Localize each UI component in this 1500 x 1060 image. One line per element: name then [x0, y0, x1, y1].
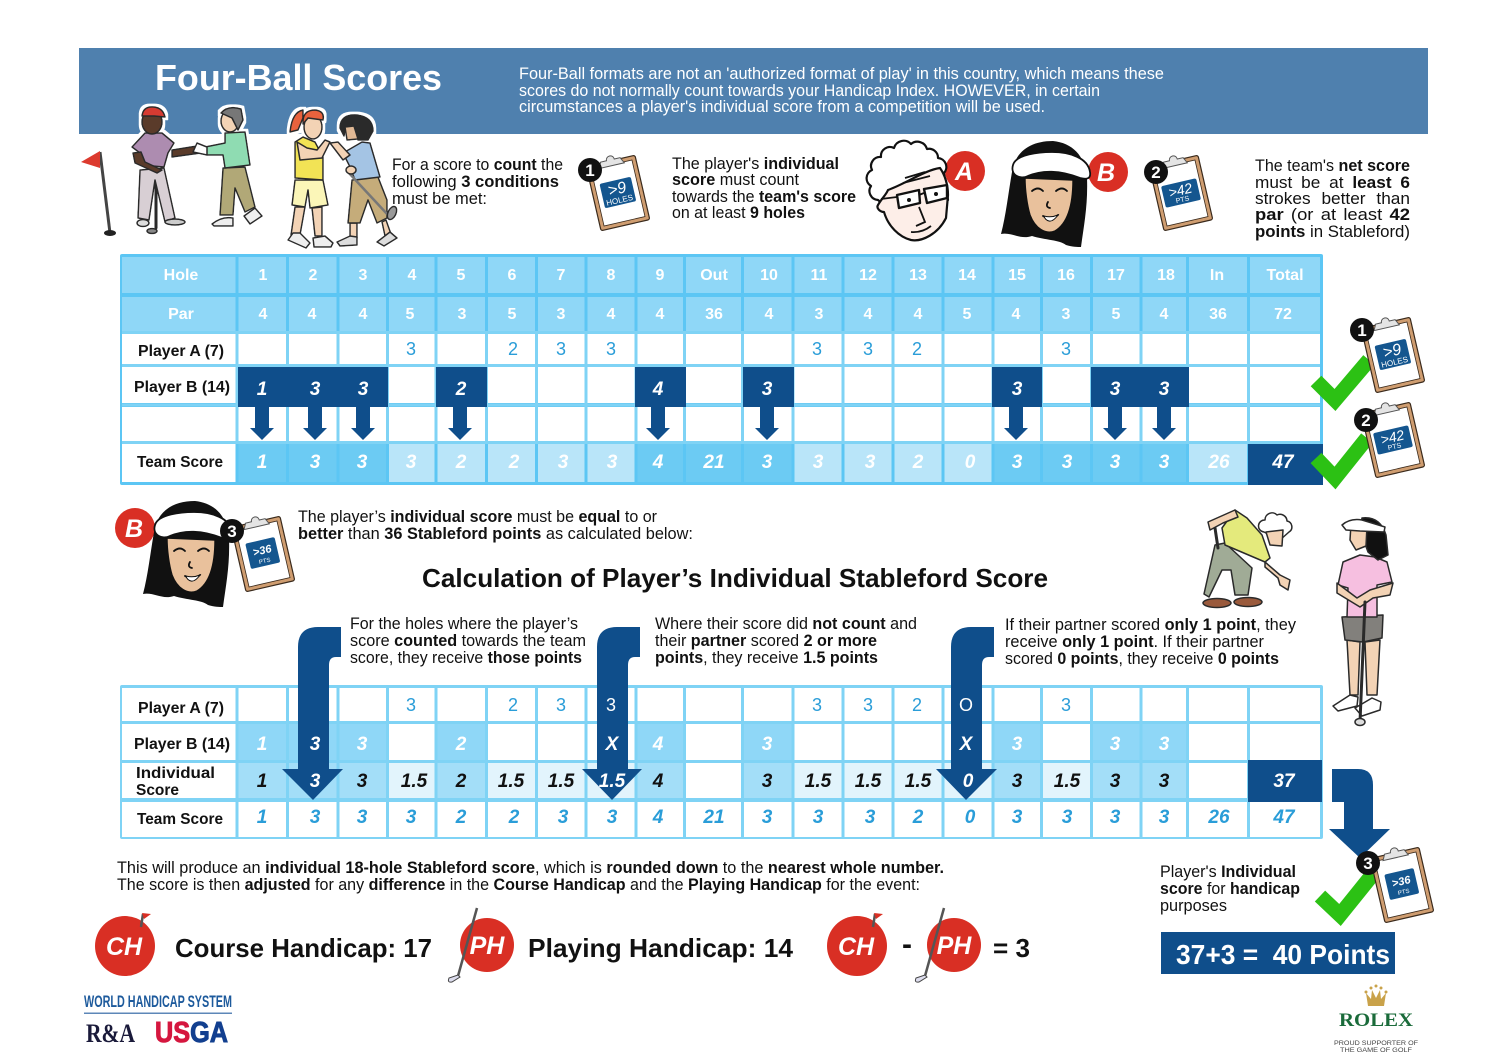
- row: hole numbers: 13: [909, 267, 927, 284]
- text: counted holes rule: score, they receive those points: [350, 648, 582, 667]
- row: hole numbers: 9: [656, 267, 665, 284]
- row: team score: 2: [912, 452, 924, 473]
- row: player B scores with dark counted cells: 1: [257, 379, 267, 400]
- row: par: Par: [168, 306, 194, 323]
- result box: [1161, 932, 1395, 974]
- row: team score: 2: [508, 807, 520, 828]
- row: player B scores with dark counted cells: 3: [1159, 379, 1170, 400]
- row: team score: 3: [406, 452, 417, 473]
- row: player A scores: 2: [912, 339, 922, 359]
- text: counted holes rule: score counted towards the team: [350, 631, 586, 650]
- row: par: 5: [1112, 306, 1121, 323]
- icon: course handicap badge: [95, 913, 155, 976]
- illustration: standing female golfer: [1333, 518, 1393, 726]
- row: player B: 3: [1110, 734, 1121, 755]
- row: player B: [134, 734, 1170, 755]
- row: hole numbers: 12: [859, 267, 877, 284]
- row: par: 36: [705, 306, 723, 323]
- row: team score: 3: [1159, 807, 1170, 828]
- text: condition two: par (or at least 42: [1255, 205, 1410, 224]
- row: team score: Team Score: [137, 454, 223, 471]
- row: individual score: 1: [257, 771, 267, 792]
- checkmark and clipboard: condition 1 met: >9: [1381, 341, 1403, 362]
- equation: course minus playing handicap: -: [902, 928, 912, 961]
- row: par: 5: [963, 306, 972, 323]
- row: team score: 3: [310, 807, 321, 828]
- row: individual score: 0: [963, 771, 974, 792]
- illustration: player A face with badge: [867, 141, 985, 240]
- arrows: counted scores down to team score: [250, 407, 1176, 440]
- row: hole numbers: 15: [1008, 267, 1026, 284]
- row: player A: Player A (7): [138, 700, 224, 717]
- row: team score: [137, 807, 1296, 828]
- heading: calculation section: Calculation of Player’s Individual Stableford Score: [422, 563, 1048, 593]
- row: individual score: 1.5: [855, 771, 882, 792]
- text: not counted rule: [655, 614, 917, 667]
- text: counted holes rule: For the holes where the player’s: [350, 614, 578, 633]
- title: Four-Ball Scores: [155, 57, 442, 98]
- row: team score: 26: [1207, 452, 1230, 473]
- row: team score: 1: [257, 452, 267, 473]
- row: hole numbers: 4: [408, 267, 417, 284]
- row: hole numbers: Hole: [164, 267, 198, 284]
- row: player B scores with dark counted cells: 4: [652, 379, 664, 400]
- row: par: 72: [1274, 306, 1292, 323]
- row: hole numbers: 6: [508, 267, 517, 284]
- row: individual score: 1.5: [905, 771, 932, 792]
- row: team score: 3: [865, 452, 876, 473]
- row: team score: 3: [762, 452, 773, 473]
- row: player A scores: 2: [508, 339, 518, 359]
- row: team score: 3: [310, 452, 321, 473]
- row: par: [168, 306, 1292, 323]
- row: team score: 3: [1159, 452, 1170, 473]
- row: par: 4: [864, 306, 873, 323]
- text: three conditions intro: following 3 conditions: [392, 172, 559, 191]
- illustration: two female golfers high-fiving: [288, 110, 399, 248]
- row: par: 4: [1160, 306, 1169, 323]
- arrow: total to result: [1329, 769, 1390, 858]
- text: condition two: The team's net score: [1255, 156, 1410, 175]
- row: hole numbers: 11: [811, 267, 828, 284]
- row: player B: 3: [357, 734, 368, 755]
- row: team score: [137, 444, 1323, 485]
- row: team score: 2: [455, 807, 467, 828]
- text: third condition: better than 36 Stableford points as calculated below:: [298, 524, 693, 543]
- text: handicap purposes: Player's Individual: [1160, 862, 1296, 881]
- text: playing handicap value: Playing Handicap: 14: [528, 933, 794, 963]
- row: player B scores with dark counted cells: 3: [1110, 379, 1121, 400]
- checkmark and clipboard: condition 3 met: >36: [1391, 874, 1413, 890]
- checkmark and clipboard: condition 2 met: [1316, 397, 1425, 478]
- arrow: not counted holes: [582, 627, 642, 800]
- text: not counted rule: their partner scored 2 or more: [655, 631, 877, 650]
- row: par: 4: [308, 306, 317, 323]
- row: team score: 0: [965, 807, 976, 828]
- text: third condition: The player’s individual score must be equal to or: [298, 507, 657, 526]
- illustration: bending older woman: [1203, 510, 1292, 608]
- icon: clipboard 1, more than 9 holes: 1: [585, 161, 595, 180]
- row: team score: 3: [1110, 807, 1121, 828]
- text: partner one point rule: If their partner scored only 1 point, they: [1005, 615, 1296, 634]
- row: team score: 3: [1062, 452, 1073, 473]
- row: player B: X: [959, 734, 974, 755]
- row: player B scores with dark counted cells: 3: [310, 379, 321, 400]
- row: hole numbers: 1: [259, 267, 268, 284]
- row: player B: X: [605, 734, 620, 755]
- row: player B: Player B (14): [134, 736, 230, 753]
- row: par: 4: [607, 306, 616, 323]
- text: partner one point rule: receive only 1 point. If their partner: [1005, 632, 1264, 651]
- icon: course handicap badge: CH: [106, 933, 143, 961]
- row: individual score: Score: [136, 782, 179, 799]
- text: handicap purposes: score for handicap: [1160, 879, 1300, 898]
- row: hole numbers: [164, 267, 1304, 284]
- logo: World Handicap System, R&A, USGA: USGA: [155, 1017, 228, 1049]
- row: team score: 1: [257, 807, 267, 828]
- row: team score: 0: [965, 452, 976, 473]
- row: player B: 2: [455, 734, 467, 755]
- text: not counted rule: points, they receive 1.5 points: [655, 648, 878, 667]
- row: par: 3: [815, 306, 824, 323]
- row: hole numbers: 5: [457, 267, 466, 284]
- row: par: 4: [1012, 306, 1021, 323]
- row: team score: 3: [607, 807, 618, 828]
- row: player B: 3: [1012, 734, 1023, 755]
- header banner: [79, 48, 1428, 134]
- row: team score: 3: [357, 807, 368, 828]
- arrow: partner zero points: [936, 627, 997, 800]
- logo: World Handicap System, R&A, USGA: WORLD HANDICAP SYSTEM: [84, 992, 232, 1011]
- row: team score: 4: [652, 452, 664, 473]
- text: condition two: points in Stableford): [1255, 222, 1410, 241]
- row: team score: 47: [1271, 452, 1295, 473]
- header description text: [519, 64, 1164, 116]
- row: player B: 1: [257, 734, 267, 755]
- icon: playing handicap badge: [448, 908, 514, 982]
- player B counted cell fills: [238, 724, 1186, 760]
- icon: golf flag: [81, 151, 116, 236]
- equation: course minus playing handicap: PH: [937, 932, 972, 960]
- arrow: counted holes: [282, 627, 343, 800]
- text: condition one: [672, 154, 856, 222]
- icon: clipboard 1, more than 9 holes: [578, 150, 650, 231]
- row: team score: 3: [865, 807, 876, 828]
- icon: clipboard 1, more than 9 holes: >9: [606, 179, 628, 200]
- row: player A: O: [959, 695, 973, 715]
- row: team score: 3: [406, 807, 417, 828]
- checkmark and clipboard: condition 3 met: [1320, 842, 1434, 923]
- illustration: player B face with badge: B: [1097, 159, 1115, 187]
- text: not counted rule: Where their score did not count and: [655, 614, 917, 633]
- individual stableford table: [120, 627, 1323, 839]
- checkmark and clipboard: condition 3 met: 3: [1363, 854, 1373, 873]
- checkmark and clipboard: condition 2 met: >42: [1379, 427, 1406, 448]
- row: hole numbers: 7: [557, 267, 566, 284]
- icon: clipboard 1, more than 9 holes: HOLES: [605, 193, 634, 208]
- text: three conditions intro: must be met:: [392, 189, 487, 208]
- row: par: 4: [359, 306, 368, 323]
- row: team score: 3: [558, 807, 569, 828]
- team scorecard table: [120, 254, 1323, 485]
- illustration: player B face with clipboard 3: [115, 501, 295, 607]
- text: three conditions intro: For a score to count the: [392, 155, 563, 174]
- text: course handicap value: Course Handicap: 17: [175, 933, 432, 963]
- row: player A: 3: [556, 695, 566, 715]
- row: player B: 3: [1159, 734, 1170, 755]
- logo: World Handicap System, R&A, USGA: R&A: [86, 1019, 135, 1048]
- checkmark and clipboard: condition 1 met: HOLES: [1380, 355, 1409, 370]
- row: team score: Team Score: [137, 811, 223, 828]
- text: condition one: The player's individual: [672, 154, 839, 173]
- row: player A scores: 3: [812, 339, 822, 359]
- row: par: 36: [1209, 306, 1227, 323]
- row: hole numbers: 8: [607, 267, 616, 284]
- row: par: 4: [765, 306, 774, 323]
- row: par: 3: [1062, 306, 1071, 323]
- row: individual score: 2: [455, 771, 467, 792]
- text: condition one: on at least 9 holes: [672, 203, 805, 222]
- checkmark and clipboard: condition 1 met: 1: [1357, 321, 1367, 340]
- row: team score: 3: [813, 807, 824, 828]
- total cell: [1248, 760, 1322, 802]
- row: team score: 26: [1207, 807, 1230, 828]
- text: partner one point rule: scored 0 points, they receive 0 points: [1005, 649, 1279, 668]
- row: par: 4: [656, 306, 665, 323]
- row: player B scores with dark counted cells: 2: [455, 379, 467, 400]
- row: team score: 21: [702, 807, 725, 828]
- row: team score: 3: [1012, 452, 1023, 473]
- row: individual score: 3: [310, 771, 321, 792]
- row: player A scores: 3: [406, 339, 416, 359]
- text: condition two: must be at least 6: [1255, 173, 1410, 192]
- row: player B scores with dark counted cells: 3: [1012, 379, 1023, 400]
- row: individual score: 3: [1012, 771, 1023, 792]
- text: condition one: towards the team's score: [672, 187, 856, 206]
- header description text: scores do not normally count towards your Handicap Index. HOWEVER, in certain: [519, 81, 1100, 100]
- row: player B scores with dark counted cells: Player B (14): [134, 379, 230, 396]
- row: player B scores with dark counted cells: 3: [358, 379, 369, 400]
- row: player A scores: Player A (7): [138, 343, 224, 360]
- row: hole numbers: 3: [359, 267, 368, 284]
- row: individual score: 1.5: [1054, 771, 1081, 792]
- logo: Rolex: ROLEX: [1339, 1010, 1413, 1031]
- row: individual score: Individual: [136, 765, 215, 782]
- row: par: 5: [508, 306, 517, 323]
- row: team score: 47: [1272, 807, 1296, 828]
- row: hole numbers: 16: [1057, 267, 1075, 284]
- row: individual score: 1.5: [548, 771, 575, 792]
- text: third condition: [298, 507, 693, 543]
- row: player A: 3: [1061, 695, 1071, 715]
- text: condition one: score must count: [672, 170, 799, 189]
- row: team score: 4: [652, 807, 664, 828]
- text: condition two: [1255, 156, 1410, 241]
- illustration: player B face with badge: [1001, 141, 1128, 247]
- row: individual score: [136, 765, 1296, 799]
- logo: World Handicap System, R&A, USGA: [84, 992, 232, 1049]
- illustration: two male golfers shaking hands: [132, 107, 262, 234]
- result box: 37+3 = 40 Points: [1176, 939, 1390, 970]
- row: individual score: 1.5: [599, 771, 626, 792]
- text: partner one point rule: [1005, 615, 1296, 668]
- row: player A scores: 3: [1061, 339, 1071, 359]
- row: player A scores: [138, 339, 1071, 360]
- row: par: 4: [914, 306, 923, 323]
- individual score cell fills: [238, 763, 1186, 798]
- row: individual score: 37: [1273, 771, 1296, 792]
- text: three conditions intro: [392, 155, 563, 208]
- row: player A: 2: [912, 695, 922, 715]
- row: player A: 3: [812, 695, 822, 715]
- row: individual score: 1.5: [805, 771, 832, 792]
- row: player B scores with dark counted cells: [134, 367, 1189, 407]
- logo: Rolex: THE GAME OF GOLF: [1340, 1047, 1412, 1054]
- row: hole numbers: 18: [1157, 267, 1175, 284]
- row: player B: 3: [762, 734, 773, 755]
- row: team score: 2: [508, 452, 520, 473]
- row: team score: 3: [357, 452, 368, 473]
- text: individual score explanation: [117, 858, 944, 894]
- row: individual score: 1.5: [401, 771, 428, 792]
- icon: playing handicap badge: PH: [470, 932, 505, 960]
- checkmark and clipboard: condition 3 met: PTS: [1397, 889, 1410, 897]
- row: hole numbers: In: [1210, 267, 1224, 284]
- text: handicap purposes: [1160, 862, 1300, 915]
- text: handicap purposes: purposes: [1160, 896, 1227, 915]
- row: player B: 4: [652, 734, 664, 755]
- row: hole numbers: Total: [1266, 267, 1304, 284]
- checkmark and clipboard: condition 1 met: [1316, 312, 1425, 400]
- row: player A scores: 3: [863, 339, 873, 359]
- text: individual score explanation: This will produce an individual 18-hole Stableford score, which is rounded down to the nearest whole number.: [117, 858, 944, 877]
- illustration: player A face with badge: A: [954, 158, 973, 186]
- row: team score: 3: [1012, 807, 1023, 828]
- row: hole numbers: 2: [309, 267, 318, 284]
- header description text: circumstances a player's individual score from a competition will be used.: [519, 97, 1045, 116]
- row: hole numbers: 10: [760, 267, 778, 284]
- equation: course minus playing handicap: [827, 908, 1030, 982]
- row: player A: [138, 695, 1071, 717]
- logo: Rolex: PROUD SUPPORTER OF: [1334, 1040, 1418, 1047]
- row: hole numbers: 17: [1107, 267, 1125, 284]
- checkmark and clipboard: condition 2 met: PTS: [1387, 442, 1402, 452]
- team score row cell fills: [238, 444, 1247, 482]
- logo: Rolex: [1334, 984, 1418, 1054]
- row: individual score: 3: [357, 771, 368, 792]
- row: player A: 3: [863, 695, 873, 715]
- row: team score: 3: [607, 452, 618, 473]
- row: team score: 3: [813, 452, 824, 473]
- row: hole numbers: 14: [958, 267, 976, 284]
- icon: clipboard 2, more than 42 points: >42: [1167, 180, 1194, 201]
- row: team score: 2: [912, 807, 924, 828]
- row: individual score: 3: [762, 771, 773, 792]
- row: individual score: 3: [1159, 771, 1170, 792]
- icon: clipboard 2, more than 42 points: 2: [1151, 163, 1161, 182]
- row: individual score: 1.5: [498, 771, 525, 792]
- row: individual score: 4: [652, 771, 664, 792]
- illustration: player B face with clipboard 3: 3: [227, 522, 237, 541]
- row: player B scores with dark counted cells: 3: [762, 379, 773, 400]
- row: player A scores: 3: [556, 339, 566, 359]
- row: team score: 3: [558, 452, 569, 473]
- row: team score: 3: [762, 807, 773, 828]
- text: individual score explanation: The score is then adjusted for any difference in the Course Handicap and the Playing Handicap for the event:: [117, 875, 920, 894]
- row: player B: 3: [310, 734, 321, 755]
- row: player A: 3: [406, 695, 416, 715]
- illustration: player B face with clipboard 3: PTS: [258, 558, 271, 566]
- row: par: 3: [458, 306, 467, 323]
- text: counted holes rule: [350, 614, 586, 667]
- row: par: 5: [406, 306, 415, 323]
- illustration: player B face with clipboard 3: B: [125, 515, 143, 543]
- checkmark and clipboard: condition 2 met: 2: [1361, 411, 1371, 430]
- row: team score: 3: [1062, 807, 1073, 828]
- text: condition two: strokes better than: [1255, 189, 1410, 208]
- row: player A: 2: [508, 695, 518, 715]
- row: par: 4: [259, 306, 268, 323]
- icon: clipboard 2, more than 42 points: PTS: [1175, 195, 1190, 205]
- icon: clipboard 2, more than 42 points: [1144, 150, 1213, 231]
- equation: course minus playing handicap: = 3: [993, 933, 1030, 963]
- row: player A: 3: [606, 695, 616, 715]
- header description text: Four-Ball formats are not an 'authorized format of play' in this country, which means these: [519, 64, 1164, 83]
- illustration: player B face with clipboard 3: >36: [252, 543, 274, 559]
- row: individual score: 3: [1110, 771, 1121, 792]
- row: team score: 21: [702, 452, 725, 473]
- row: player A scores: 3: [606, 339, 616, 359]
- row: team score: 2: [455, 452, 467, 473]
- row: team score: 3: [1110, 452, 1121, 473]
- row: hole numbers: Out: [700, 267, 728, 284]
- row: par: 3: [557, 306, 566, 323]
- equation: course minus playing handicap: CH: [838, 933, 875, 961]
